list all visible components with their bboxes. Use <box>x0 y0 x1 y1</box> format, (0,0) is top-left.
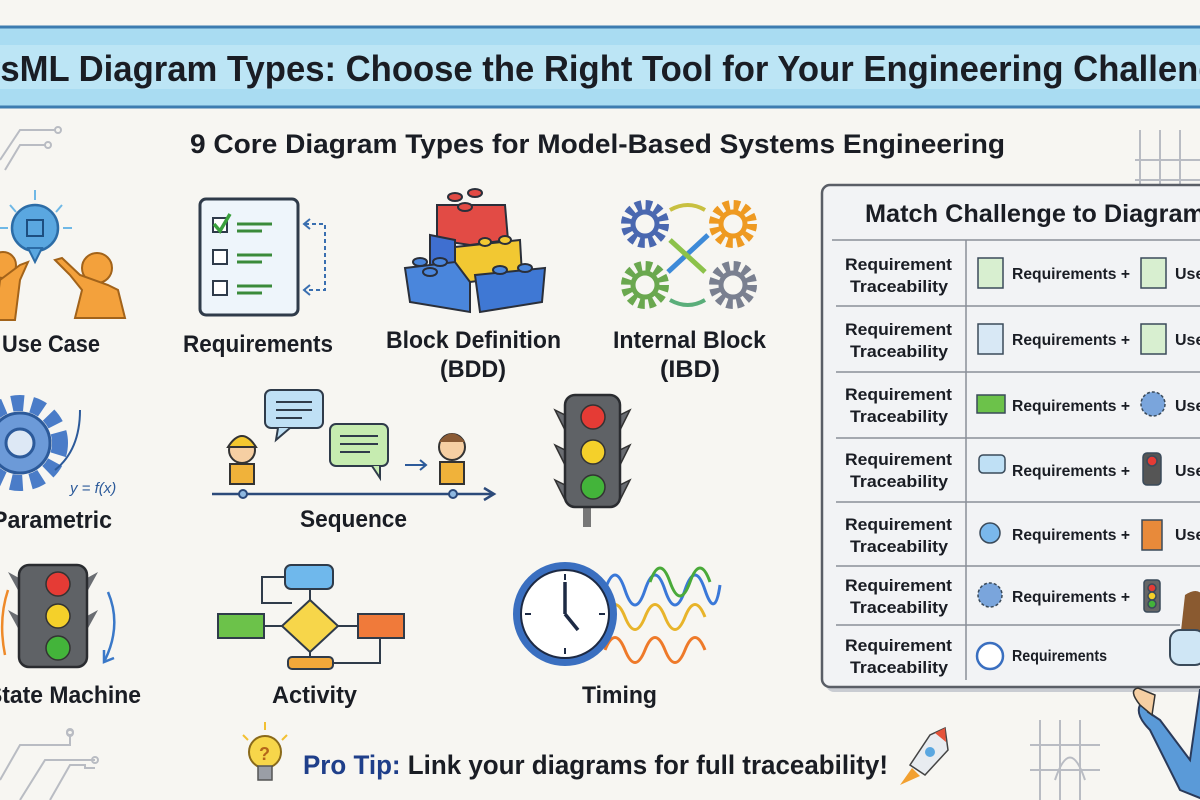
table rows: Traceability <box>850 658 949 677</box>
table rows: Traceability <box>850 598 949 617</box>
icon: lego blocks <box>405 189 545 312</box>
icon: sequence diagram <box>212 390 494 500</box>
panel: internal block <box>613 205 767 383</box>
label: block definition: Block Definition <box>386 327 561 354</box>
character: engineer <box>1133 591 1200 800</box>
subtitle: 9 Core Diagram Types for Model-Based Systems Engineering <box>190 129 1005 159</box>
icon: parametric gear: y = f(x) <box>69 480 116 497</box>
icon: gears <box>626 205 752 305</box>
panel: state machine <box>0 565 141 709</box>
icon: activity flow <box>218 565 404 669</box>
table rows: Traceability <box>850 277 949 296</box>
icon: use case <box>0 190 125 320</box>
table rows: Requirement <box>845 515 952 534</box>
table rows: Traceability <box>850 342 949 361</box>
icon: rocket <box>900 728 948 785</box>
label: requirements: Requirements <box>183 331 333 358</box>
panel: requirements <box>183 199 333 358</box>
label: sequence: Sequence <box>300 506 407 533</box>
table rows: Requirement <box>845 636 952 655</box>
icon: state machine traffic light <box>2 565 114 667</box>
icon: clock and waves <box>517 566 720 662</box>
label: activity: Activity <box>272 682 358 709</box>
table rows: Traceability <box>850 537 949 556</box>
table rows <box>845 255 952 677</box>
panel: timing <box>517 566 720 709</box>
table rows: Traceability <box>850 407 949 426</box>
panel: match challenge table: Requirements + <box>1012 589 1130 606</box>
panel: match challenge table: Requirements + <box>1012 463 1130 480</box>
icon: traffic light <box>555 395 630 527</box>
table icons <box>977 258 1166 669</box>
icon: light bulb <box>243 722 287 780</box>
table rows: Requirement <box>845 255 952 274</box>
panel: match challenge table <box>822 185 1200 692</box>
panel: sequence <box>212 390 494 533</box>
table rows: Traceability <box>850 472 949 491</box>
panel: block definition <box>386 189 561 383</box>
icon: light bulb: ? <box>259 744 270 764</box>
panel: block definition: (BDD) <box>440 356 506 383</box>
label: timing: Timing <box>582 682 657 709</box>
panel: parametric <box>0 403 116 534</box>
panel: match challenge table: Requirements <box>1012 648 1107 665</box>
label: internal block: Internal Block <box>613 327 767 354</box>
table heading: Match Challenge to Diagram <box>865 200 1200 228</box>
panel: use case <box>0 190 125 358</box>
icon: requirements checklist <box>200 199 325 315</box>
title banner <box>0 27 1200 107</box>
pro tip <box>243 722 948 785</box>
panel: match challenge table: Requirements + <box>1012 332 1130 349</box>
panel: internal block: (IBD) <box>660 356 720 383</box>
label: use case: Use Case <box>2 331 100 358</box>
panel: activity <box>218 565 404 709</box>
panel: match challenge table: Requirements + <box>1012 266 1130 283</box>
table rows: Requirement <box>845 450 952 469</box>
panel: match challenge table: Requirements + <box>1012 527 1130 544</box>
table rows: Requirement <box>845 385 952 404</box>
table rows: Requirement <box>845 576 952 595</box>
table rows: Requirement <box>845 320 952 339</box>
pro tip text: Pro Tip: Link your diagrams for full traceability! <box>303 750 888 780</box>
panel: match challenge table: Requirements + <box>1012 398 1130 415</box>
